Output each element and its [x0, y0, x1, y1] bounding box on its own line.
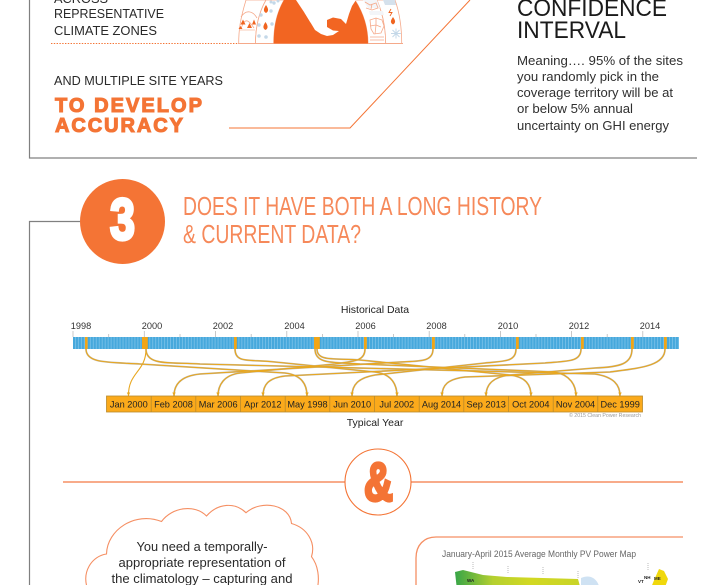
icon: ampersand circle	[345, 449, 411, 515]
panel: PV power map	[416, 537, 683, 585]
panel: section 2 frame	[30, 0, 697, 158]
text: across representative climate zones	[54, 0, 164, 38]
chart: historical to typical year timeline	[71, 304, 679, 429]
typical year month boxes: Jul 2002	[379, 400, 414, 410]
arrow: connector line to confidence interval	[229, 0, 470, 128]
year labels: 2012	[569, 321, 589, 331]
year labels: 2000	[142, 321, 162, 331]
heading: to develop accuracy: TO DEVELOP	[55, 95, 202, 117]
typical year month boxes: Jun 2010	[333, 400, 371, 410]
year labels: 2002	[213, 321, 233, 331]
heading: confidence interval: INTERVAL	[517, 17, 626, 44]
typical year month boxes: Dec 1999	[601, 400, 640, 410]
year labels: 2004	[284, 321, 305, 331]
typical year month boxes	[106, 396, 642, 412]
typical year month boxes: Mar 2006	[199, 400, 238, 410]
heading: does it have both a long history and current data: DOES IT HAVE BOTH A LONG HISTORY	[183, 191, 542, 221]
map: solar resource: VT	[638, 579, 644, 584]
text: meaning of confidence interval	[517, 53, 684, 133]
badge: number 3: 3	[110, 188, 135, 252]
typical year month boxes: Aug 2014	[422, 400, 461, 410]
year labels	[71, 321, 660, 331]
map title: January-April 2015 Average Monthly PV Power Map	[442, 549, 636, 559]
year labels: 2010	[498, 321, 518, 331]
typical year month boxes: Nov 2004	[556, 400, 595, 410]
text: meaning of confidence interval: coverage territory will be at	[517, 85, 673, 100]
credit: © 2015 Clean Power Research	[569, 412, 641, 419]
text: and multiple site years: AND MULTIPLE SITE YEARS	[54, 73, 223, 88]
dotted divider to globe	[51, 42, 238, 44]
icon: ampersand circle: &	[364, 452, 393, 512]
timeline bar	[73, 337, 679, 349]
text: meaning of confidence interval: you randomly pick in the	[517, 69, 659, 84]
highlighted months	[85, 337, 667, 349]
heading: confidence interval	[517, 0, 667, 44]
connector curves shadow	[86, 349, 665, 396]
arrowheads	[127, 392, 622, 396]
callout: cloud with climatology text	[86, 505, 318, 585]
text: across representative climate zones: REPRESENTATIVE	[54, 6, 164, 21]
connector curves	[86, 349, 665, 396]
map: solar resource: NH	[644, 575, 650, 580]
badge: number 3	[80, 179, 165, 264]
label: historical data: Historical Data	[341, 304, 409, 316]
text: meaning of confidence interval: Meaning…. 95% of the sites	[517, 53, 684, 68]
year ticks	[73, 331, 643, 337]
map: solar resource	[455, 562, 668, 585]
typical year month boxes: Sep 2013	[467, 400, 506, 410]
typical year month boxes: Feb 2008	[154, 400, 193, 410]
text: across representative climate zones: CLIMATE ZONES	[54, 23, 157, 38]
year labels: 1998	[71, 321, 91, 331]
icon: climate zones globe	[238, 0, 403, 44]
panel: section 3 frame	[30, 222, 80, 585]
heading: does it have both a long history and current data: & CURRENT DATA?	[183, 219, 361, 249]
heading: to develop accuracy	[55, 95, 202, 137]
year labels: 2008	[426, 321, 447, 331]
divider: ampersand line	[63, 481, 683, 483]
year labels: 2006	[355, 321, 376, 331]
label: typical year: Typical Year	[347, 417, 404, 429]
map: solar resource: WA	[467, 578, 475, 583]
typical year month boxes: Jan 2000	[110, 400, 148, 410]
heading: to develop accuracy: ACCURACY	[55, 115, 184, 137]
year labels: 2014	[640, 321, 660, 331]
map: solar resource: ME	[654, 576, 661, 581]
typical year month boxes: May 1998	[287, 400, 328, 410]
heading: does it have both a long history and current data	[183, 191, 542, 249]
text: meaning of confidence interval: or below 5% annual	[517, 101, 633, 116]
callout: cloud with climatology text: appropriate representation of	[118, 555, 286, 570]
typical year month boxes: Oct 2004	[512, 400, 549, 410]
callout: cloud with climatology text: You need a temporally-	[136, 539, 268, 554]
text: meaning of confidence interval: uncertainty on GHI energy	[517, 118, 669, 133]
typical year month boxes: Apr 2012	[244, 400, 281, 410]
